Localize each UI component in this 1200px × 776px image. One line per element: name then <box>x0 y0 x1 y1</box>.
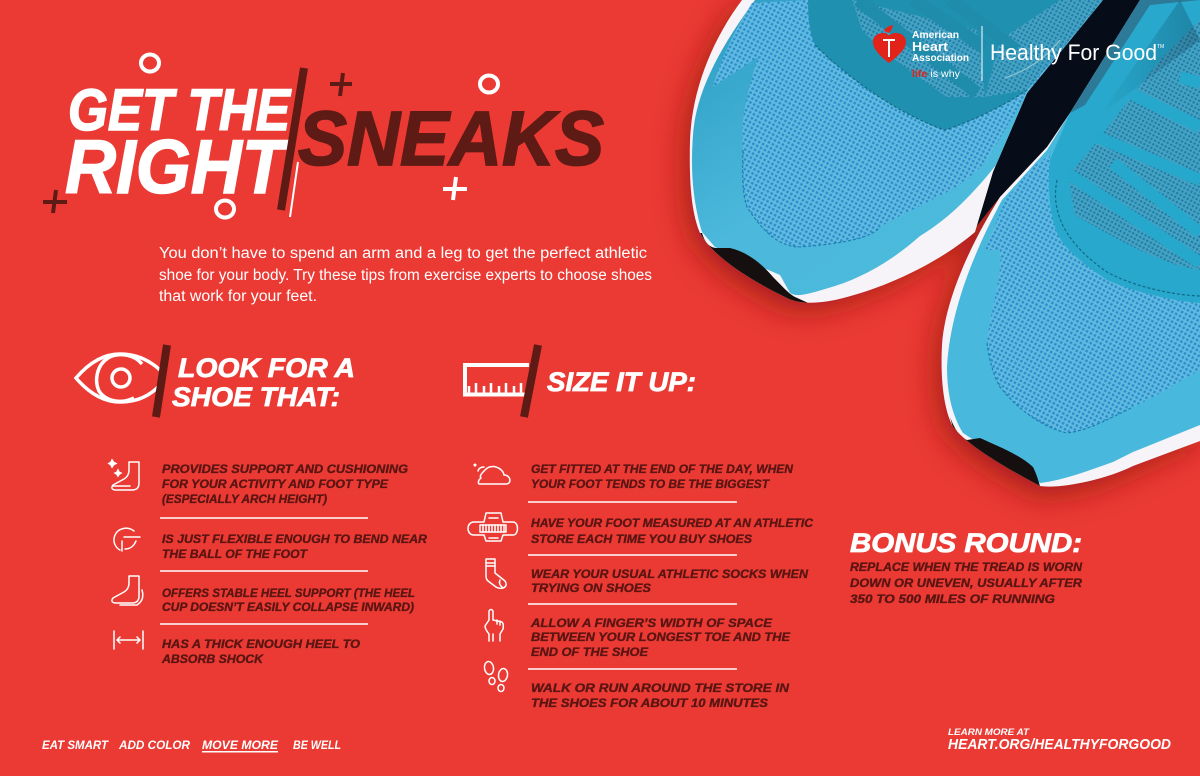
icon: ruler <box>465 365 529 394</box>
title: RIGHT <box>65 125 290 210</box>
title: get the right: GET THE <box>68 78 292 143</box>
item: fitted at end of day: GET FITTED AT THE END OF THE DAY, WHEN <box>531 464 794 476</box>
item: thick heel <box>114 631 360 666</box>
title: sneaks: SNEAKS <box>298 96 604 182</box>
right shoe <box>930 0 1200 490</box>
icon: pointing hand <box>485 610 503 641</box>
icon: sock <box>486 559 506 588</box>
left shoe <box>680 0 1120 310</box>
icon: flex arc <box>114 528 140 551</box>
shoe shadow <box>686 8 1196 494</box>
heading: SIZE IT UP: <box>547 367 696 397</box>
footer link: LEARN MORE AT <box>948 727 1031 737</box>
heading slash bar <box>156 345 167 417</box>
item: support and cushioning <box>108 459 408 506</box>
intro paragraph: that work for your feet. <box>159 288 317 305</box>
item: stable heel support: OFFERS STABLE HEEL SUPPORT (THE HEEL <box>162 588 415 600</box>
bonus text <box>850 562 1083 606</box>
item: walk or run <box>484 661 790 710</box>
footer navigation: MOVE MORE <box>202 740 278 752</box>
item: foot measured: HAVE YOUR FOOT MEASURED AT AN ATHLETIC <box>531 518 814 530</box>
panel: size it up <box>465 345 814 710</box>
panel: look for a shoe that <box>76 345 428 666</box>
bonus text: 350 TO 500 MILES OF RUNNING <box>850 594 1055 606</box>
item: walk or run: THE SHOES FOR ABOUT 10 MINUTES <box>531 698 768 710</box>
icon: foot with sparkles <box>108 459 139 490</box>
footer navigation <box>42 740 341 752</box>
intro paragraph: shoe for your body. Try these tips from exercise experts to choose shoes <box>159 267 652 284</box>
heading slash bar <box>524 345 538 417</box>
icon: footprints <box>484 661 508 692</box>
gap between shoes <box>972 0 1142 232</box>
logo wordmark: Association <box>912 52 969 64</box>
footer link: HEART.ORG/HEALTHYFORGOOD <box>948 736 1171 753</box>
item: athletic socks <box>486 559 809 595</box>
logo wordmark <box>912 29 969 64</box>
title <box>43 54 604 218</box>
logo divider <box>982 26 983 81</box>
icon: sunset cloud <box>474 464 510 484</box>
title slash bars <box>281 68 304 210</box>
item: flexible near the ball of the foot: IS JUST FLEXIBLE ENOUGH TO BEND NEAR <box>162 534 428 546</box>
item: finger width of space <box>485 610 790 659</box>
footer link <box>948 727 1171 753</box>
item: walk or run: WALK OR RUN AROUND THE STORE IN <box>531 683 790 695</box>
footer navigation: BE WELL <box>293 740 341 752</box>
icon: heart and torch <box>873 25 906 63</box>
item: fitted at end of day: YOUR FOOT TENDS TO BE THE BIGGEST <box>531 479 770 491</box>
heading <box>172 353 355 412</box>
logo tagline: life is why <box>912 69 960 80</box>
bonus text: REPLACE WHEN THE TREAD IS WORN <box>850 562 1083 574</box>
item: support and cushioning: PROVIDES SUPPORT AND CUSHIONING <box>162 464 408 476</box>
icon: foot with heel cup <box>112 576 143 605</box>
item: flexible near the ball of the foot <box>114 528 428 561</box>
bonus heading: BONUS ROUND: <box>850 528 1082 558</box>
item: thick heel: HAS A THICK ENOUGH HEEL TO <box>162 639 360 651</box>
icon: eye <box>76 354 160 402</box>
Healthy For Good wordmark: Healthy For Good <box>990 40 1157 65</box>
decorative rings and plus signs <box>43 54 498 218</box>
footer navigation: ADD COLOR <box>118 740 191 752</box>
icon: foot measuring device <box>468 513 518 541</box>
logo wordmark: American <box>912 29 959 41</box>
panel: bonus round <box>850 528 1083 606</box>
item: thick heel: ABSORB SHOCK <box>161 654 264 666</box>
item: foot measured <box>468 513 814 546</box>
trademark: TM <box>1157 44 1164 50</box>
intro paragraph: You don’t have to spend an arm and a leg to get the perfect athletic <box>159 245 647 262</box>
item: athletic socks: TRYING ON SHOES <box>531 583 651 595</box>
item: support and cushioning: FOR YOUR ACTIVITY AND FOOT TYPE <box>162 479 388 491</box>
heading: SHOE THAT: <box>172 382 340 412</box>
American Heart Association logo <box>873 25 1164 81</box>
item: athletic socks: WEAR YOUR USUAL ATHLETIC SOCKS WHEN <box>531 569 809 581</box>
heading: LOOK FOR A <box>178 353 355 383</box>
item: foot measured: STORE EACH TIME YOU BUY SHOES <box>531 534 752 546</box>
item: finger width of space: ALLOW A FINGER’S WIDTH OF SPACE <box>530 618 772 630</box>
item: finger width of space: END OF THE SHOE <box>531 647 648 659</box>
footer navigation: EAT SMART <box>42 740 109 752</box>
item: finger width of space: BETWEEN YOUR LONGEST TOE AND THE <box>531 632 790 644</box>
item: flexible near the ball of the foot: THE BALL OF THE FOOT <box>162 549 308 561</box>
item: stable heel support <box>112 576 415 614</box>
intro paragraph <box>159 245 652 305</box>
item: stable heel support: CUP DOESN’T EASILY COLLAPSE INWARD) <box>162 602 414 614</box>
icon: width arrows <box>114 631 143 649</box>
item: support and cushioning: (ESPECIALLY ARCH HEIGHT) <box>162 494 327 506</box>
bonus text: DOWN OR UNEVEN, USUALLY AFTER <box>850 578 1083 590</box>
logo wordmark: Heart <box>912 39 949 54</box>
shoes photograph <box>680 0 1200 494</box>
item: fitted at end of day <box>474 464 794 491</box>
